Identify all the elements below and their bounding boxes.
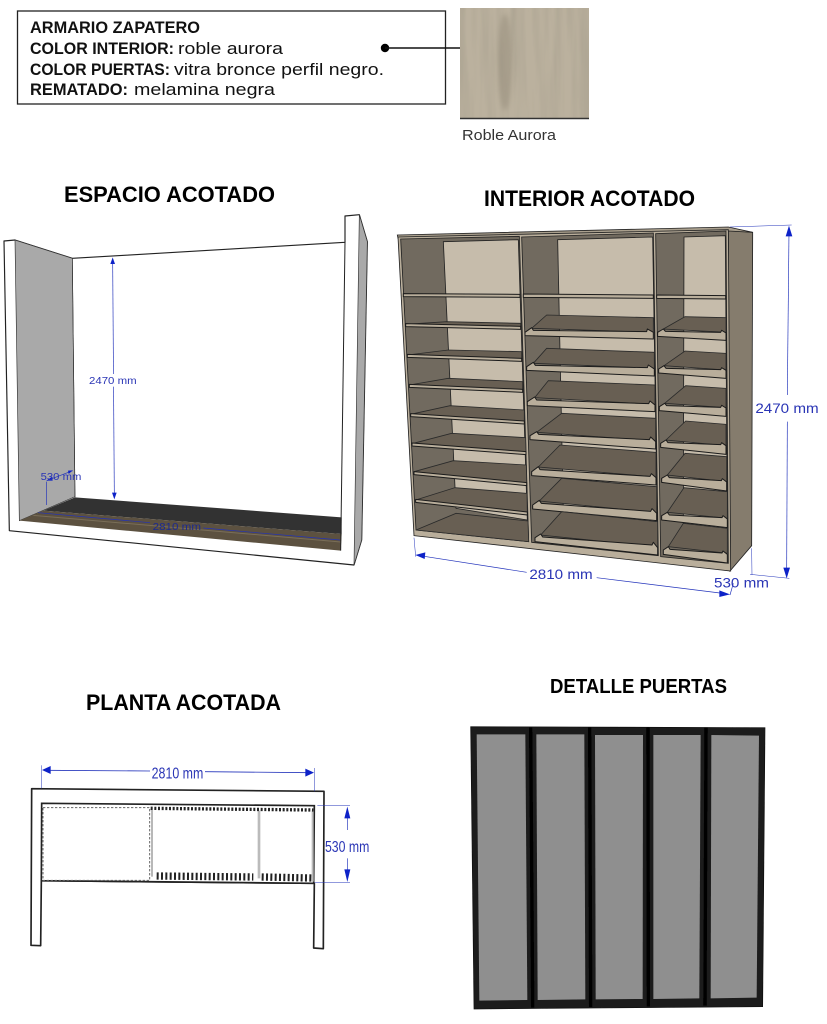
heading: detalle puertas: DETALLE PUERTAS (550, 676, 727, 698)
dimension: width 2810 mm: 2810 mm (153, 522, 201, 533)
door color value: vitra bronce perfil negro. (174, 60, 384, 79)
dimension: depth 530 mm (315, 806, 369, 883)
dimension: height 2470 mm: 2470 mm (89, 376, 137, 387)
door 1 (477, 734, 527, 1001)
interior color label: COLOR INTERIOR: (30, 39, 174, 58)
door 5 (711, 735, 759, 998)
dimension: width 2810 mm: 2810 mm (152, 766, 203, 783)
right bay (656, 231, 728, 563)
drawing: floor plan with dimensions (31, 765, 369, 949)
dimension: width 2810 mm: 2810 mm (529, 566, 593, 582)
left bay (401, 236, 529, 542)
drawing: shelving interior with dimensions (397, 225, 819, 597)
dimension: width 2810 mm (41, 765, 315, 791)
door 4 (653, 735, 701, 999)
connector line from box to swatch (381, 44, 460, 52)
dimension: width 2810 mm (414, 538, 730, 597)
door color label: COLOR PUERTAS: (30, 60, 170, 79)
drawing: empty space with dimensions (4, 215, 367, 565)
drawing: door detail (471, 727, 765, 1009)
plan interior dashed shelves (43, 808, 313, 882)
dimension: depth 530 mm: 530 mm (714, 575, 769, 591)
dimension: height 2470 mm: 2470 mm (755, 400, 819, 416)
dimension: depth 530 mm (714, 548, 789, 595)
heading: interior acotado: INTERIOR ACOTADO (484, 186, 695, 211)
carcass (397, 227, 753, 571)
material swatch: roble aurora (460, 8, 589, 118)
finish label: REMATADO: (30, 80, 128, 99)
heading: planta acotada: PLANTA ACOTADA (86, 690, 281, 715)
plan outline (31, 789, 324, 949)
swatch caption: Roble Aurora (462, 127, 557, 144)
info box: product specification (18, 11, 446, 104)
dimension: height 2470 mm (87, 257, 138, 499)
dimension: depth 530 mm (41, 470, 81, 505)
dimension: height 2470 mm (730, 225, 819, 578)
interior color value: roble aurora (178, 39, 284, 58)
door 3 (595, 735, 643, 999)
dimension: width 2810 mm (38, 513, 340, 540)
heading: espacio acotado: ESPACIO ACOTADO (64, 182, 275, 207)
dimension: depth 530 mm: 530 mm (41, 472, 81, 483)
dimension: depth 530 mm: 530 mm (325, 839, 369, 856)
middle bay (522, 233, 658, 556)
product name: ARMARIO ZAPATERO (30, 18, 200, 37)
door 2 (536, 734, 585, 1000)
finish value: melamina negra (134, 80, 276, 99)
